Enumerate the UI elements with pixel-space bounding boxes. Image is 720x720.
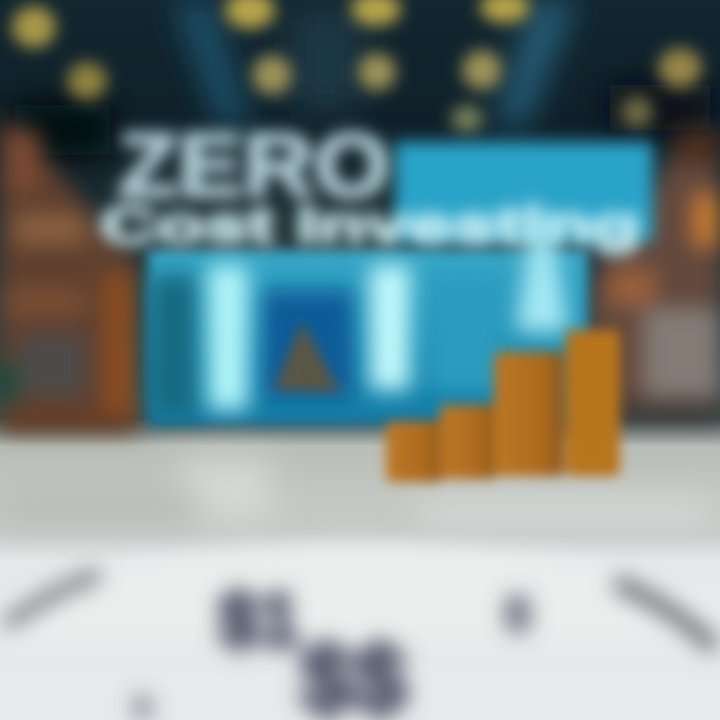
heading: blurred title: Cost Investing [100,197,640,255]
chart: stacked coin bars [386,330,620,482]
light columns [208,220,570,410]
blurred dollar text [135,578,531,720]
blurred dollar text: 5 [505,588,531,640]
floor patches [0,460,710,525]
ceiling lights [12,0,702,133]
shelves: right [590,125,720,420]
heading: blurred title [100,116,640,255]
ceiling light beams [15,0,710,155]
banner: upper blue sign [395,142,653,242]
panel: central blue wall [148,250,588,425]
heading: blurred title: ZERO [118,116,390,216]
blurred dollar text: $1 [218,578,300,661]
icon: dark triangle [274,322,340,392]
plate: white coin surface [0,545,720,648]
shelves: left [0,115,138,432]
